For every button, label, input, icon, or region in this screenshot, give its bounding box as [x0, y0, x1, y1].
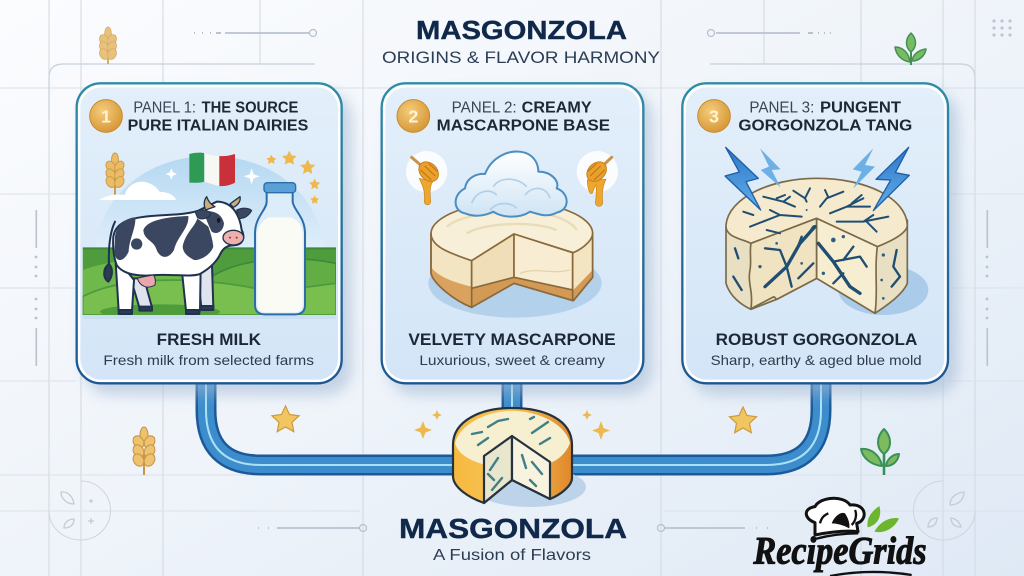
corner leaf marks: [61, 492, 964, 528]
panel 2 number badge: [397, 100, 430, 132]
icon: wheat bottom left: [131, 427, 157, 475]
panel 2 card: [382, 83, 643, 383]
cheese veins: [472, 417, 550, 490]
bottom title: MASGONZOLA: [399, 513, 627, 544]
icon: leaf sprig top right: [895, 33, 926, 65]
illustration: plate shadow: [428, 249, 602, 318]
panel 3: pungent gorgonzola tang: [682, 83, 948, 383]
panel 2 caption: [408, 330, 616, 368]
panel 2 number badge: 2: [408, 107, 418, 127]
illustration: blue veins: [733, 188, 900, 293]
icon: leaf sprig bottom right: [861, 429, 899, 475]
logo chef hat: [806, 498, 864, 539]
illustration: gorgonzola wedge cut: [726, 178, 907, 313]
logo leaves: [867, 506, 899, 532]
panel 1 caption: Fresh milk from selected farms: [103, 352, 314, 368]
central masgonzola cheese: [453, 408, 586, 507]
panel 3 caption: Sharp, earthy & aged blue mold: [711, 352, 922, 368]
panel 1 number badge: 1: [101, 107, 111, 127]
panel 3 heading: PANEL 3:: [749, 99, 814, 116]
panel 1 heading: PANEL 1:: [133, 99, 196, 116]
connecting pipes: [206, 380, 821, 465]
subtitle: ORIGINS & FLAVOR HARMONY: [382, 48, 660, 67]
star right: [730, 407, 756, 433]
icon: honey dipper right: [577, 151, 618, 206]
illustration: milk bottle: [255, 183, 305, 314]
illustration: sky dome: [95, 156, 325, 257]
title: MASGONZOLA: [416, 15, 627, 45]
sparkles and gold stars: [166, 151, 320, 204]
sparkles around cheese: [414, 410, 610, 440]
illustration: cheese shadow: [838, 265, 928, 315]
bottom subtitle: A Fusion of Flavors: [433, 547, 591, 564]
panel 2 heading: MASCARPONE BASE: [437, 118, 610, 135]
cheese shadow: [474, 467, 586, 507]
decorative connectors: [194, 30, 831, 532]
panel shadows: [84, 92, 958, 395]
icon: honey dipper left: [406, 151, 447, 205]
panel 2 heading: [437, 99, 610, 135]
cheese mold specks: [758, 209, 885, 300]
panel 1 heading: PURE ITALIAN DAIRIES: [128, 118, 309, 135]
panel 3 number badge: [698, 100, 730, 132]
icon: wheat: [104, 153, 126, 195]
panel 3 heading: [738, 99, 912, 135]
logo swoosh: [830, 572, 912, 576]
illustration: cow: [104, 197, 252, 314]
panel 2: creamy mascarpone base: [382, 83, 643, 383]
panel 1: the source: [77, 83, 342, 383]
dot grid icon: [992, 19, 1012, 37]
panel 2 heading: PANEL 2:: [452, 99, 517, 116]
logo wordmark: RecipeGrids: [752, 528, 927, 572]
icon: lightning bolts: [725, 147, 909, 211]
icon: wheat top left: [98, 27, 118, 64]
logo: RecipeGrids: [752, 498, 927, 576]
panel 3 caption: [711, 330, 922, 368]
panel 1 caption: [103, 330, 314, 368]
illustration: green hills: [83, 248, 336, 319]
side tick marks: [35, 210, 988, 366]
star left: [272, 406, 299, 432]
panel 1 number badge: [90, 100, 122, 132]
panel 3 caption: ROBUST GORGONZOLA: [716, 330, 917, 349]
illustration: cloud: [99, 182, 176, 200]
icon: italian flag: [189, 153, 235, 186]
panel 1 caption: FRESH MILK: [157, 330, 261, 349]
panel 2 caption: VELVETY MASCARPONE: [408, 330, 616, 349]
cheese wheel: [453, 408, 572, 503]
panel 2 caption: Luxurious, sweet & creamy: [419, 352, 605, 368]
panel 3 heading: GORGONZOLA TANG: [738, 118, 912, 135]
illustration: mascarpone cake: [431, 202, 593, 307]
panel 3 card: [682, 83, 948, 383]
panel 3 number badge: 3: [709, 107, 719, 127]
panel 1 heading: [128, 99, 309, 135]
panel 1 heading: THE SOURCE: [202, 99, 299, 116]
panel 2 heading: CREAMY: [522, 99, 592, 116]
illustration: whipped cloud: [456, 152, 567, 217]
panel 3 heading: PUNGENT: [820, 99, 901, 116]
panel 1 card: [77, 83, 342, 383]
